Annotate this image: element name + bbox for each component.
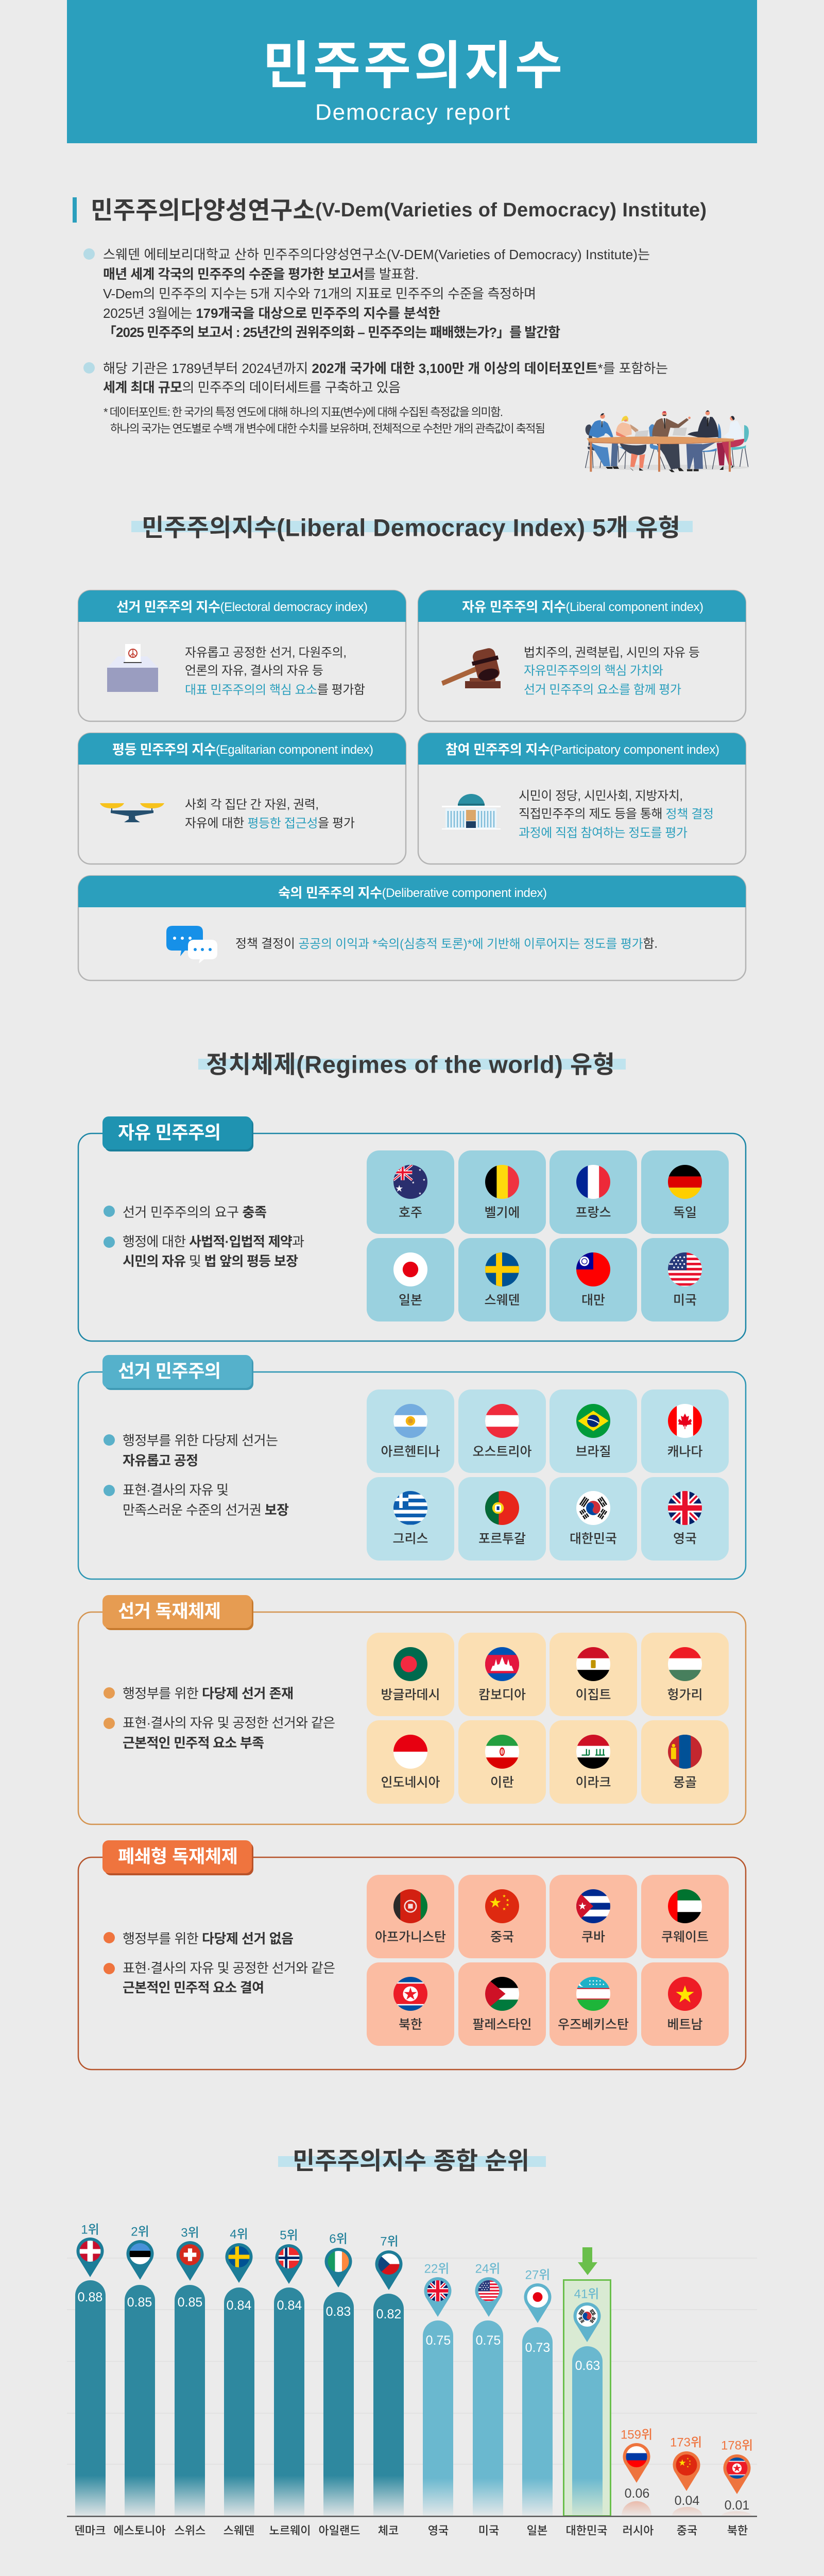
tile: 오스트리아: 오스트리아 — [472, 1445, 532, 1459]
tile: 대만: 대만 — [581, 1293, 605, 1308]
tile: 몽골: 몽골 — [673, 1775, 697, 1790]
bar: 미국: 0.75 — [476, 2333, 501, 2348]
tile: 북한 — [367, 1962, 454, 2046]
icon: gavel — [441, 647, 503, 688]
tile: 팔레스타인 — [458, 1962, 546, 2046]
tile: 오스트리아 — [458, 1389, 546, 1473]
bar: 일본 — [522, 2268, 553, 2537]
bar: 스위스: 0.85 — [178, 2295, 202, 2310]
illustration: meeting around a table — [585, 410, 749, 472]
bar: 덴마크: 0.88 — [78, 2290, 102, 2304]
bar: 중국: 중국 — [677, 2524, 697, 2537]
bar: 북한: 0.01 — [725, 2498, 749, 2513]
panel: electoral autocracy — [78, 1595, 746, 1824]
tile: 이집트 — [550, 1633, 637, 1716]
subtitle: Democracy report — [315, 100, 510, 125]
bar: 러시아: 0.06 — [625, 2486, 649, 2501]
bar: 미국: 미국 — [478, 2524, 499, 2537]
footnote: * 데이터포인트: 한 국가의 특정 연도에 대해 하나의 지표(변수)에 대해 수집된 측정값을 의미함. — [104, 406, 503, 418]
tab label: 선거 독재체제 — [118, 1601, 221, 1622]
description: 자유민주주의의 핵심 가치와 — [524, 664, 663, 678]
bar: 스위스: 스위스 — [175, 2524, 205, 2537]
description — [524, 646, 700, 697]
description — [185, 646, 365, 697]
bar: 일본: 일본 — [527, 2524, 547, 2537]
bar: 영국: 0.75 — [426, 2333, 451, 2348]
tile: 팔레스타인: 팔레스타인 — [472, 2018, 532, 2032]
tile: 캐나다: 캐나다 — [667, 1445, 703, 1459]
bar: 체코: 체코 — [378, 2524, 399, 2537]
tile: 호주 — [367, 1150, 454, 1234]
header: 선거 민주주의 지수(Electoral democracy index) — [116, 599, 368, 615]
bullet text 1: 스웨덴 에테보리대학교 산하 민주주의다양성연구소(V-DEM(Varieties of Democracy) Institute)는 — [103, 247, 650, 262]
tile: 일본 — [367, 1238, 454, 1321]
footnote — [104, 406, 545, 435]
bullet text 2: 해당 기관은 1789년부터 2024년까지 202개 국가에 대한 3,100만 개 이상의 데이터포인트*를 포함하는 — [103, 361, 668, 376]
criteria list: 근본적인 민주적 요소 결여 — [123, 1980, 264, 1995]
bar: 중국: 0.04 — [675, 2494, 699, 2508]
criteria list: 시민의 자유 및 법 앞의 평등 보장 — [123, 1253, 298, 1269]
bar: 에스토니아: 0.85 — [127, 2295, 152, 2310]
tile: 아프가니스탄: 아프가니스탄 — [375, 1930, 446, 1944]
criteria list — [104, 1931, 335, 1995]
tile: 그리스: 그리스 — [392, 1532, 428, 1546]
tile: 우즈베키스탄 — [550, 1962, 637, 2046]
header: 숙의 민주주의 지수(Deliberative component index) — [278, 885, 547, 901]
description: 언론의 자유, 결사의 자유 등 — [185, 664, 323, 678]
tile: 호주: 호주 — [399, 1206, 422, 1220]
tile: 스웨덴: 스웨덴 — [484, 1293, 520, 1308]
bar: 일본: 0.73 — [525, 2341, 550, 2355]
panel: electoral index — [78, 590, 406, 721]
description: 자유롭고 공정한 선거, 다원주의, — [185, 646, 347, 659]
bar: 대한민국: 0.63 — [575, 2359, 600, 2373]
bar: 체코 — [373, 2235, 404, 2537]
tile: 쿠바: 쿠바 — [581, 1930, 605, 1944]
description: 법치주의, 권력분립, 시민의 자유 등 — [524, 646, 700, 659]
bar: 덴마크: 1위 — [81, 2223, 99, 2237]
bar: 노르웨이: 5위 — [280, 2229, 298, 2242]
description: 대표 민주주의의 핵심 요소를 평가함 — [185, 683, 365, 697]
header: 자유 민주주의 지수(Liberal component index) — [462, 599, 703, 615]
tile: 일본: 일본 — [399, 1293, 422, 1308]
tile: 캄보디아: 캄보디아 — [478, 1688, 526, 1702]
panel: participatory index — [418, 733, 746, 864]
bar: 노르웨이: 0.84 — [277, 2298, 302, 2313]
tile: 프랑스 — [550, 1150, 637, 1234]
tile: 중국 — [458, 1875, 546, 1958]
bar: 대한민국: 41위 — [574, 2287, 599, 2301]
heading bar and title: 민주주의다양성연구소(V-Dem(Varieties of Democracy) Institute) — [91, 197, 707, 224]
section title: regimes of the world: 정치체제(Regimes of the world) 유형 — [206, 1051, 615, 1078]
tile: 방글라데시 — [367, 1633, 454, 1716]
icon: scales — [100, 803, 164, 822]
bullet text 1 — [83, 247, 650, 340]
description: 자유에 대한 평등한 접근성을 평가 — [185, 816, 355, 831]
description — [185, 798, 355, 831]
icon: speech bubbles — [166, 926, 217, 963]
bar: 러시아: 159위 — [621, 2428, 653, 2442]
tile: 헝가리: 헝가리 — [667, 1688, 703, 1702]
tile: 이란 — [458, 1720, 546, 1804]
panel: closed autocracy — [78, 1840, 746, 2070]
tile: 우즈베키스탄: 우즈베키스탄 — [558, 2018, 629, 2032]
panel: liberal index — [418, 590, 746, 721]
tile: 브라질: 브라질 — [575, 1445, 611, 1459]
section: V-Dem institute — [73, 197, 749, 472]
criteria list: 행정부를 위한 다당제 선거는 — [123, 1433, 278, 1448]
tab label — [102, 1116, 253, 1151]
panel: egalitarian index — [78, 733, 406, 864]
footnote: 하나의 국가는 연도별로 수백 개 변수에 대한 수치를 보유하며, 전체적으로 수천만 개의 관측값이 축적됨 — [110, 422, 545, 435]
bar: 에스토니아: 2위 — [131, 2225, 149, 2239]
tile: 이집트: 이집트 — [575, 1688, 611, 1702]
header banner — [67, 0, 757, 143]
tile: 브라질 — [550, 1389, 637, 1473]
criteria list: 표현·결사의 자유 및 공정한 선거와 같은 — [123, 1960, 335, 1976]
bar: 아일랜드: 아일랜드 — [319, 2524, 360, 2537]
tile: 그리스 — [367, 1477, 454, 1561]
tile: 독일: 독일 — [673, 1206, 697, 1220]
tile: 이란: 이란 — [490, 1775, 514, 1790]
panel: liberal democracy — [78, 1116, 746, 1341]
bar: 영국: 영국 — [428, 2524, 449, 2537]
bullet text 1: 「2025 민주주의 보고서 : 25년간의 권위주의화 – 민주주의는 패배했는가?」를 발간함 — [103, 325, 560, 340]
bar: 미국: 24위 — [475, 2262, 500, 2276]
tile: 스웨덴 — [458, 1238, 546, 1321]
tile: 베트남: 베트남 — [667, 2018, 703, 2032]
bar: 러시아 — [621, 2428, 654, 2537]
bar: 대한민국: 대한민국 — [566, 2524, 607, 2537]
description: 선거 민주주의 요소를 함께 평가 — [524, 683, 681, 697]
bullet text 2: 세계 최대 규모의 민주주의 데이터세트를 구축하고 있음 — [103, 380, 401, 395]
bar: 노르웨이: 노르웨이 — [269, 2524, 311, 2537]
tile: 아르헨티나: 아르헨티나 — [381, 1445, 440, 1459]
tab label: 폐쇄형 독재체제 — [118, 1846, 238, 1867]
bar: 대한민국 — [566, 2287, 607, 2537]
tile: 아르헨티나 — [367, 1389, 454, 1473]
tile: 독일 — [641, 1150, 729, 1234]
tile: 미국: 미국 — [673, 1293, 697, 1308]
description: 직접민주주의 제도 등을 통해 정책 결정 — [519, 807, 714, 821]
header: 참여 민주주의 지수(Participatory component index) — [445, 742, 719, 757]
tile: 방글라데시: 방글라데시 — [381, 1688, 440, 1702]
bar: 체코: 7위 — [380, 2235, 399, 2248]
tile: 쿠웨이트 — [641, 1875, 729, 1958]
tile: 북한: 북한 — [399, 2018, 422, 2032]
tile: 미국 — [641, 1238, 729, 1321]
criteria list — [104, 1686, 335, 1751]
bar: 영국: 22위 — [424, 2262, 449, 2276]
tab label — [102, 1595, 253, 1630]
tile: 캄보디아 — [458, 1633, 546, 1716]
description — [519, 789, 714, 840]
criteria list: 근본적인 민주적 요소 부족 — [123, 1735, 264, 1751]
bar: 북한: 북한 — [727, 2524, 748, 2537]
criteria list: 행정부를 위한 다당제 선거 없음 — [123, 1931, 294, 1946]
bar: 스위스: 3위 — [181, 2226, 199, 2240]
bar: 러시아: 러시아 — [623, 2524, 654, 2537]
criteria list: 선거 민주주의의 요구 충족 — [123, 1205, 267, 1220]
bar: 영국 — [423, 2262, 453, 2537]
bullet text 2 — [83, 361, 668, 395]
tile: 프랑스: 프랑스 — [575, 1206, 611, 1220]
bar: 스위스 — [175, 2226, 205, 2537]
bar: 북한: 178위 — [721, 2439, 753, 2452]
bullet text 1: 2025년 3월에는 179개국을 대상으로 민주주의 지수를 분석한 — [103, 306, 440, 321]
tab label — [102, 1355, 253, 1390]
bar: 중국: 173위 — [670, 2436, 702, 2449]
panel: deliberative index — [78, 876, 746, 980]
bar: 아일랜드: 6위 — [329, 2232, 348, 2246]
tile: 베트남 — [641, 1962, 729, 2046]
highlight: South Korea — [563, 2280, 611, 2516]
tile: 영국 — [641, 1477, 729, 1561]
criteria list — [104, 1205, 304, 1269]
bar: 북한 — [721, 2439, 753, 2537]
criteria list: 행정에 대한 사법적·입법적 제약과 — [123, 1234, 304, 1249]
tile: 포르투갈: 포르투갈 — [478, 1532, 526, 1546]
bar: 노르웨이 — [269, 2229, 311, 2537]
icon: national assembly — [442, 794, 501, 829]
tab label: 선거 민주주의 — [118, 1361, 221, 1382]
bar: 스웨덴: 스웨덴 — [224, 2524, 254, 2537]
bar: 에스토니아: 에스토니아 — [113, 2524, 166, 2537]
criteria list: 자유롭고 공정 — [123, 1453, 198, 1468]
tile: 인도네시아 — [367, 1720, 454, 1804]
bar: 덴마크 — [75, 2223, 106, 2537]
description: 사회 각 집단 간 자원, 권력, — [185, 798, 319, 812]
bar: 스웨덴 — [224, 2228, 254, 2537]
tile: 포르투갈 — [458, 1477, 546, 1561]
bar: 아일랜드 — [319, 2232, 360, 2537]
bullet text 1: V-Dem의 민주주의 지수는 5개 지수와 71개의 지표로 민주주의 수준을 측정하며 — [103, 286, 536, 301]
tab label — [102, 1840, 253, 1875]
description: 정책 결정이 공공의 이익과 *숙의(심층적 토론)*에 기반해 이루어지는 정도를 평가함. — [235, 937, 658, 951]
bar: 중국 — [670, 2436, 702, 2537]
icon: ballot box — [107, 644, 158, 692]
section title: overall ranking: 민주주의지수 종합 순위 — [293, 2147, 529, 2174]
section title: 5 types: 민주주의지수(Liberal Democracy Index) 5개 유형 — [142, 514, 680, 541]
criteria list: 표현·결사의 자유 및 공정한 선거와 같은 — [123, 1715, 335, 1731]
tile: 쿠웨이트: 쿠웨이트 — [661, 1930, 709, 1944]
bar: 체코: 0.82 — [376, 2307, 401, 2321]
tile: 이라크 — [550, 1720, 637, 1804]
tile: 벨기에 — [458, 1150, 546, 1234]
bullet text 1: 매년 세계 각국의 민주주의 수준을 평가한 보고서를 발표함. — [103, 266, 419, 282]
description: 시민이 정당, 시민사회, 지방자치, — [519, 789, 683, 803]
tile: 대한민국: 대한민국 — [570, 1532, 617, 1546]
tab label: 자유 민주주의 — [118, 1123, 221, 1143]
tile: 벨기에: 벨기에 — [484, 1206, 520, 1220]
tile: 대한민국 — [550, 1477, 637, 1561]
bar: 스웨덴: 0.84 — [227, 2298, 251, 2313]
tile: 쿠바 — [550, 1875, 637, 1958]
criteria list: 만족스러운 수준의 선거권 보장 — [123, 1502, 289, 1518]
criteria list: 표현·결사의 자유 및 — [123, 1482, 229, 1498]
tile: 중국: 중국 — [490, 1930, 514, 1944]
tile: 몽골 — [641, 1720, 729, 1804]
arrow: points to South Korea — [578, 2247, 597, 2275]
bar: 일본: 27위 — [525, 2268, 550, 2282]
title: 민주주의지수 — [263, 37, 562, 95]
tile: 영국: 영국 — [673, 1532, 697, 1546]
bar: 에스토니아 — [113, 2225, 166, 2537]
tile: 캐나다 — [641, 1389, 729, 1473]
panel: electoral democracy — [78, 1355, 746, 1579]
tile: 헝가리 — [641, 1633, 729, 1716]
tile: 대만 — [550, 1238, 637, 1321]
tile: 이라크: 이라크 — [575, 1775, 611, 1790]
bar: 덴마크: 덴마크 — [75, 2524, 106, 2537]
header: 평등 민주주의 지수(Egalitarian component index) — [112, 742, 373, 757]
description: 과정에 직접 참여하는 정도를 평가 — [519, 826, 688, 840]
bar chart: democracy ranking — [67, 2223, 757, 2537]
criteria list: 행정부를 위한 다당제 선거 존재 — [123, 1686, 294, 1701]
tile: 아프가니스탄 — [367, 1875, 454, 1958]
bar: 스웨덴: 4위 — [230, 2228, 248, 2241]
bar: 아일랜드: 0.83 — [326, 2304, 351, 2319]
criteria list — [104, 1433, 289, 1518]
bar: 미국 — [473, 2262, 503, 2537]
tile: 인도네시아: 인도네시아 — [381, 1775, 440, 1790]
